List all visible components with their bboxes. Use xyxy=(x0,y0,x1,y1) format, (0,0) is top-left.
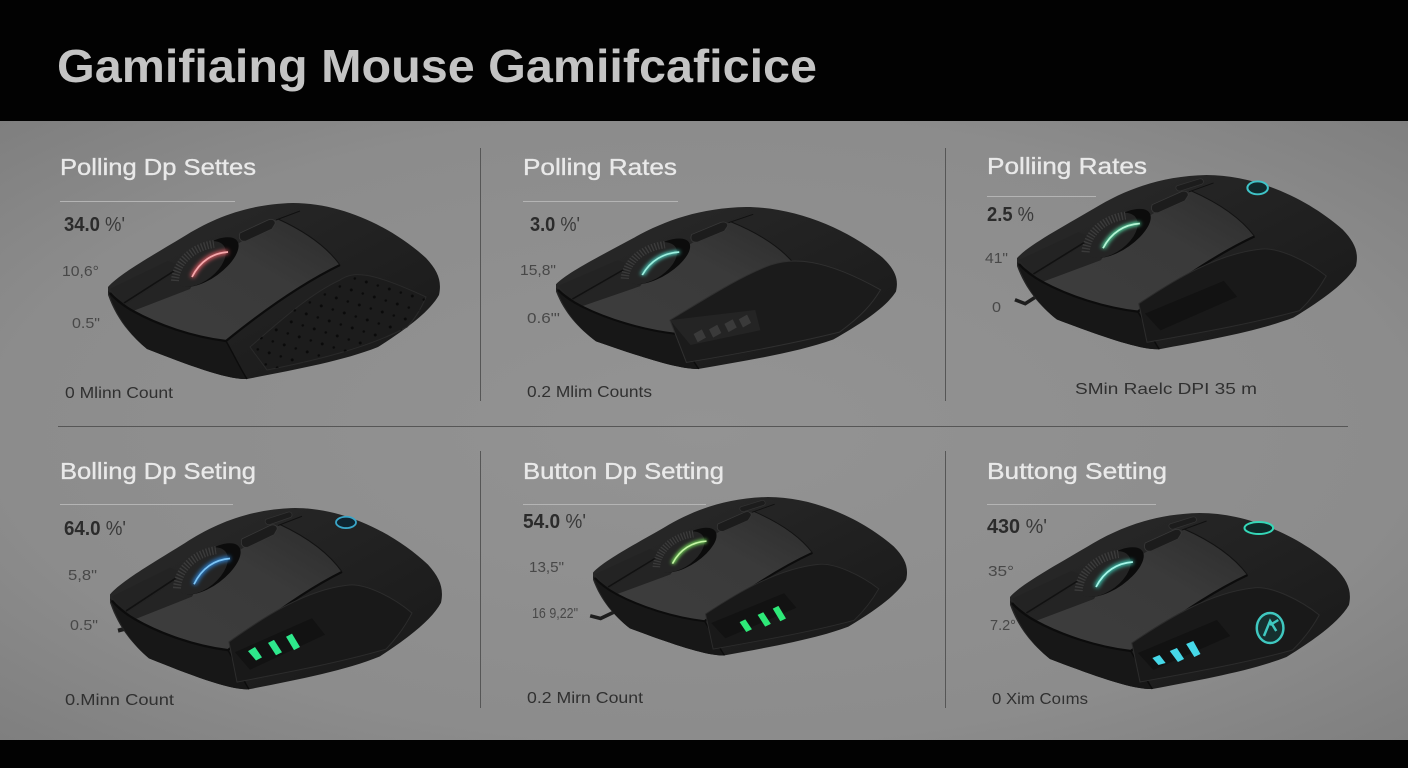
heading: Bolling Dp Seting xyxy=(60,458,256,484)
label: 41" xyxy=(985,250,1008,267)
heading: Buttong Setting xyxy=(987,458,1167,484)
caption: 0 Xim Coıms xyxy=(992,691,1088,708)
value: 64.0 %' xyxy=(64,518,126,540)
value: 54.0 %' xyxy=(523,511,586,533)
header band xyxy=(0,0,1408,121)
label: 0.6"' xyxy=(527,310,560,327)
label: 13,5" xyxy=(529,559,564,576)
heading: Button Dp Setting xyxy=(523,458,724,484)
mouse with teal wheel light, LEDs and logos xyxy=(1010,513,1350,689)
label: 0.5" xyxy=(70,617,98,634)
LED bars xyxy=(248,634,300,660)
caption: 0 Mlinn Count xyxy=(65,385,174,402)
icon: logo xyxy=(336,517,356,528)
caption: SMin Raelc DPI 35 m xyxy=(1075,381,1257,398)
label: 5,8" xyxy=(68,567,97,584)
panel: top left mouse xyxy=(60,154,440,402)
panel: bottom right mouse xyxy=(987,458,1350,708)
mouse with pink wheel light and dotted grip xyxy=(108,203,440,379)
value: 2.5 % xyxy=(987,204,1034,226)
panel: top right mouse xyxy=(985,153,1357,398)
label: 0 xyxy=(992,299,1001,316)
heading: Polling Rates xyxy=(523,154,677,180)
panel: bottom center mouse xyxy=(523,458,907,707)
label: 35° xyxy=(988,563,1014,580)
panel: bottom left mouse xyxy=(60,458,442,709)
icon: side logo xyxy=(1257,613,1283,643)
heading: Polliing Rates xyxy=(987,153,1147,179)
value: 3.0 %' xyxy=(530,214,580,236)
title: Gamifiaing Mouse Gamiifcaficice xyxy=(57,40,817,92)
LED bars xyxy=(1152,641,1200,665)
LED bars xyxy=(740,606,786,632)
label: 7.2° xyxy=(990,617,1016,634)
label: 0.5" xyxy=(72,315,100,332)
panel: top center mouse xyxy=(520,154,897,401)
icon: top logo xyxy=(1244,522,1273,534)
label: 16 9,22" xyxy=(532,605,578,622)
mouse with green wheel light and LEDs xyxy=(590,497,907,655)
mouse with teal wheel light xyxy=(556,207,897,369)
value: 430 %' xyxy=(987,516,1047,538)
caption: 0.2 Mirn Count xyxy=(527,690,644,707)
heading: Polling Dp Settes xyxy=(60,154,256,180)
icon: logo xyxy=(1247,181,1268,194)
mouse with green wheel light and logo xyxy=(1015,175,1357,349)
footer band xyxy=(0,740,1408,768)
caption: 0.2 Mlim Counts xyxy=(527,384,652,401)
value: 34.0 %' xyxy=(64,214,125,236)
mouse with blue wheel light and green LEDs xyxy=(110,508,442,689)
label: 15,8" xyxy=(520,262,556,279)
label: 10,6° xyxy=(62,263,99,280)
caption: 0.Minn Count xyxy=(65,692,175,709)
